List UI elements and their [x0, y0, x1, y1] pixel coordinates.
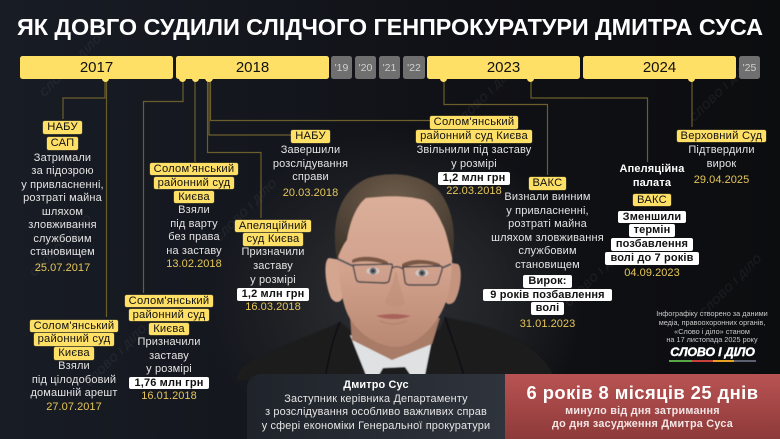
event: bail 16.01.2018 [124, 294, 214, 402]
event: custody 13.02.2018: під варту [170, 218, 218, 230]
event: appeal 04.09.2023 [605, 163, 699, 279]
event: verdict 31.01.2023: становищем [515, 259, 580, 271]
event: verdict 31.01.2023 [483, 176, 612, 330]
event: appeal 04.09.2023: Апеляційна [620, 163, 684, 175]
event: detention 25.07.2017: НАБУ [47, 121, 78, 133]
event: bail 16.01.2018: у розмірі [146, 363, 192, 375]
event: appeal 04.09.2023: 04.09.2023 [624, 267, 680, 279]
timeline year bar: '19 [335, 62, 348, 74]
event: verdict 31.01.2023: 9 років позбавлення [490, 289, 605, 301]
event: supreme court 29.04.2025: вирок [707, 158, 736, 170]
event: detention 25.07.2017: розтраті майна [23, 192, 102, 204]
event: house arrest 27.07.2017: Києва [58, 347, 90, 359]
event: bail 16.03.2018: у розмірі [250, 274, 296, 286]
timeline year bar [20, 56, 760, 82]
event: investigation finished 20.03.2018: розслідування [273, 158, 348, 170]
event: verdict 31.01.2023: шляхом зловживання [491, 232, 604, 244]
event: supreme court 29.04.2025: Підтвердили [688, 144, 755, 156]
event: bail 16.03.2018: суд Києва [247, 233, 299, 245]
event: appeal 04.09.2023: ВАКС [637, 194, 667, 206]
credits note: Інфографіку створено за даними [656, 309, 768, 318]
text: СЛОВО І ДІЛО [698, 253, 765, 319]
event: house arrest 27.07.2017: Взяли [58, 360, 90, 372]
credits note: на 17 листопада 2025 року [666, 335, 758, 344]
event: house arrest 27.07.2017 [29, 319, 119, 413]
event: verdict 31.01.2023: у привласненні, [506, 205, 589, 217]
event: bail 16.01.2018: Призначили [137, 336, 201, 348]
event: supreme court 29.04.2025 [676, 129, 767, 186]
title: ЯК ДОВГО СУДИЛИ СЛІДЧОГО ГЕНПРОКУРАТУРИ ДМИТРА СУСА [17, 14, 763, 40]
event: bail 16.03.2018: 16.03.2018 [245, 301, 301, 313]
timeline year bar: 2018 [236, 59, 269, 76]
event: detention 25.07.2017: Затримали [34, 152, 91, 164]
timeline year bar: '22 [407, 62, 421, 74]
event: investigation finished 20.03.2018: справи [292, 171, 329, 183]
event: released on bail 22.03.2018: 1,2 млн грн [443, 172, 505, 184]
event: bail 16.03.2018: Апеляційний [239, 220, 307, 232]
event: bail 16.03.2018: заставу [253, 260, 293, 272]
event: detention 25.07.2017: 25.07.2017 [35, 262, 90, 274]
event: bail 16.01.2018: заставу [149, 350, 189, 362]
panel: duration callout [505, 374, 780, 439]
timeline year bar: '25 [743, 62, 756, 74]
event: appeal 04.09.2023: волі до 7 років [610, 252, 694, 264]
event: verdict 31.01.2023: 31.01.2023 [520, 318, 575, 330]
person role: Заступник керівника Департаменту [284, 392, 468, 404]
text: СЛОВО І ДІЛО [453, 63, 520, 129]
event: released on bail 22.03.2018: 22.03.2018 [446, 185, 502, 197]
event: appeal 04.09.2023: Зменшили [623, 211, 681, 223]
person role: у сфері економіки Генеральної прокуратури [262, 420, 490, 432]
event: bail 16.01.2018: Києва [153, 323, 185, 335]
event: released on bail 22.03.2018: Звільнили під заставу [417, 144, 531, 156]
text: СЛОВО І ДІЛО [688, 58, 755, 124]
timeline year bar: 2023 [487, 59, 520, 76]
text: СЛОВО І ДІЛО [83, 323, 150, 389]
event: house arrest 27.07.2017: під цілодобовий [32, 374, 116, 386]
timeline year bar: '20 [359, 62, 372, 74]
event: supreme court 29.04.2025: 29.04.2025 [694, 174, 749, 186]
event: investigation finished 20.03.2018: НАБУ [295, 130, 326, 142]
event: detention 25.07.2017 [21, 120, 104, 274]
event: bail 16.01.2018: Солом'янський [129, 295, 209, 307]
event: released on bail 22.03.2018: у розмірі [451, 158, 497, 170]
event: appeal 04.09.2023: палата [633, 177, 671, 189]
event: custody 13.02.2018: Взяли [178, 204, 210, 216]
event: custody 13.02.2018: Києва [178, 191, 210, 203]
event: released on bail 22.03.2018: районний суд Києва [420, 130, 528, 142]
event: custody 13.02.2018: на заставу [166, 244, 222, 256]
event: bail 16.03.2018 [234, 219, 312, 313]
duration note: до дня засудження Дмитра Суса [552, 418, 733, 430]
person role: з розслідування особливо важливих справ [265, 406, 487, 418]
event: detention 25.07.2017: за підозрою [31, 165, 94, 177]
event: bail 16.03.2018: 1,2 млн грн [242, 288, 304, 300]
event: house arrest 27.07.2017: Солом'янський [34, 320, 114, 332]
event: custody 13.02.2018: 13.02.2018 [166, 258, 222, 270]
event: verdict 31.01.2023: Визнали винним [504, 191, 591, 203]
event: custody 13.02.2018 [149, 162, 239, 270]
event: released on bail 22.03.2018: Солом'янський [434, 116, 514, 128]
panel: person caption [247, 374, 505, 439]
event: verdict 31.01.2023: службовим [518, 245, 577, 257]
event: house arrest 27.07.2017: районний суд [38, 333, 110, 345]
event: verdict 31.01.2023: ВАКС [533, 177, 562, 189]
event: detention 25.07.2017: становищем [30, 246, 95, 258]
event: house arrest 27.07.2017: 27.07.2017 [46, 401, 102, 413]
credits note: «Слово і діло» станом [674, 327, 750, 336]
event: custody 13.02.2018: Солом'янський [154, 163, 234, 175]
event: appeal 04.09.2023: термін [634, 224, 670, 236]
credits note: медіа, правоохоронних органів, [659, 318, 765, 327]
text: СЛОВО І ДІЛО [38, 33, 105, 99]
timeline year bar: 2024 [643, 59, 676, 76]
event: custody 13.02.2018: без права [168, 231, 220, 243]
portrait photo [237, 174, 552, 380]
event: bail 16.01.2018: районний суд [133, 309, 205, 321]
event: custody 13.02.2018: районний суд [158, 177, 230, 189]
credits note [656, 309, 768, 344]
timeline year bar: '21 [383, 62, 396, 74]
event: investigation finished 20.03.2018: Завершили [281, 144, 340, 156]
event: bail 16.03.2018: Призначили [241, 246, 305, 258]
event: verdict 31.01.2023: волі [536, 302, 559, 314]
event: released on bail 22.03.2018 [415, 115, 533, 197]
event: house arrest 27.07.2017: домашній арешт [30, 387, 118, 399]
event: supreme court 29.04.2025: Верховний Суд [681, 130, 762, 142]
event: detention 25.07.2017: САП [51, 137, 74, 149]
event: bail 16.01.2018: 16.01.2018 [141, 390, 197, 402]
event: detention 25.07.2017: у привласненні, [21, 179, 104, 191]
duration note: минуло від дня затримання [565, 404, 720, 416]
event: verdict 31.01.2023: Вирок: [528, 275, 567, 287]
event: investigation finished 20.03.2018: 20.03.2018 [283, 186, 338, 198]
text: СЛОВО І ДІЛО [28, 213, 95, 279]
event: investigation finished 20.03.2018 [273, 129, 348, 198]
text: СЛОВО І ДІЛО [213, 178, 280, 244]
text: СЛОВО І ДІЛО [563, 243, 630, 309]
event: detention 25.07.2017: зловживання [28, 219, 97, 231]
duration figure: 6 років 8 місяців 25 днів [527, 382, 758, 403]
logo: Слово і діло: СЛОВО І ДІЛО [670, 345, 755, 359]
person name: Дмитро Сус [343, 379, 409, 391]
event: verdict 31.01.2023: розтраті майна [508, 218, 587, 230]
event: bail 16.01.2018: 1,76 млн грн [134, 377, 204, 389]
person role [262, 392, 490, 432]
event: detention 25.07.2017: шляхом [42, 206, 83, 218]
event: detention 25.07.2017: службовим [33, 233, 92, 245]
duration note [552, 404, 733, 430]
event: appeal 04.09.2023: позбавлення [616, 238, 688, 250]
timeline year bar: 2017 [80, 59, 113, 76]
